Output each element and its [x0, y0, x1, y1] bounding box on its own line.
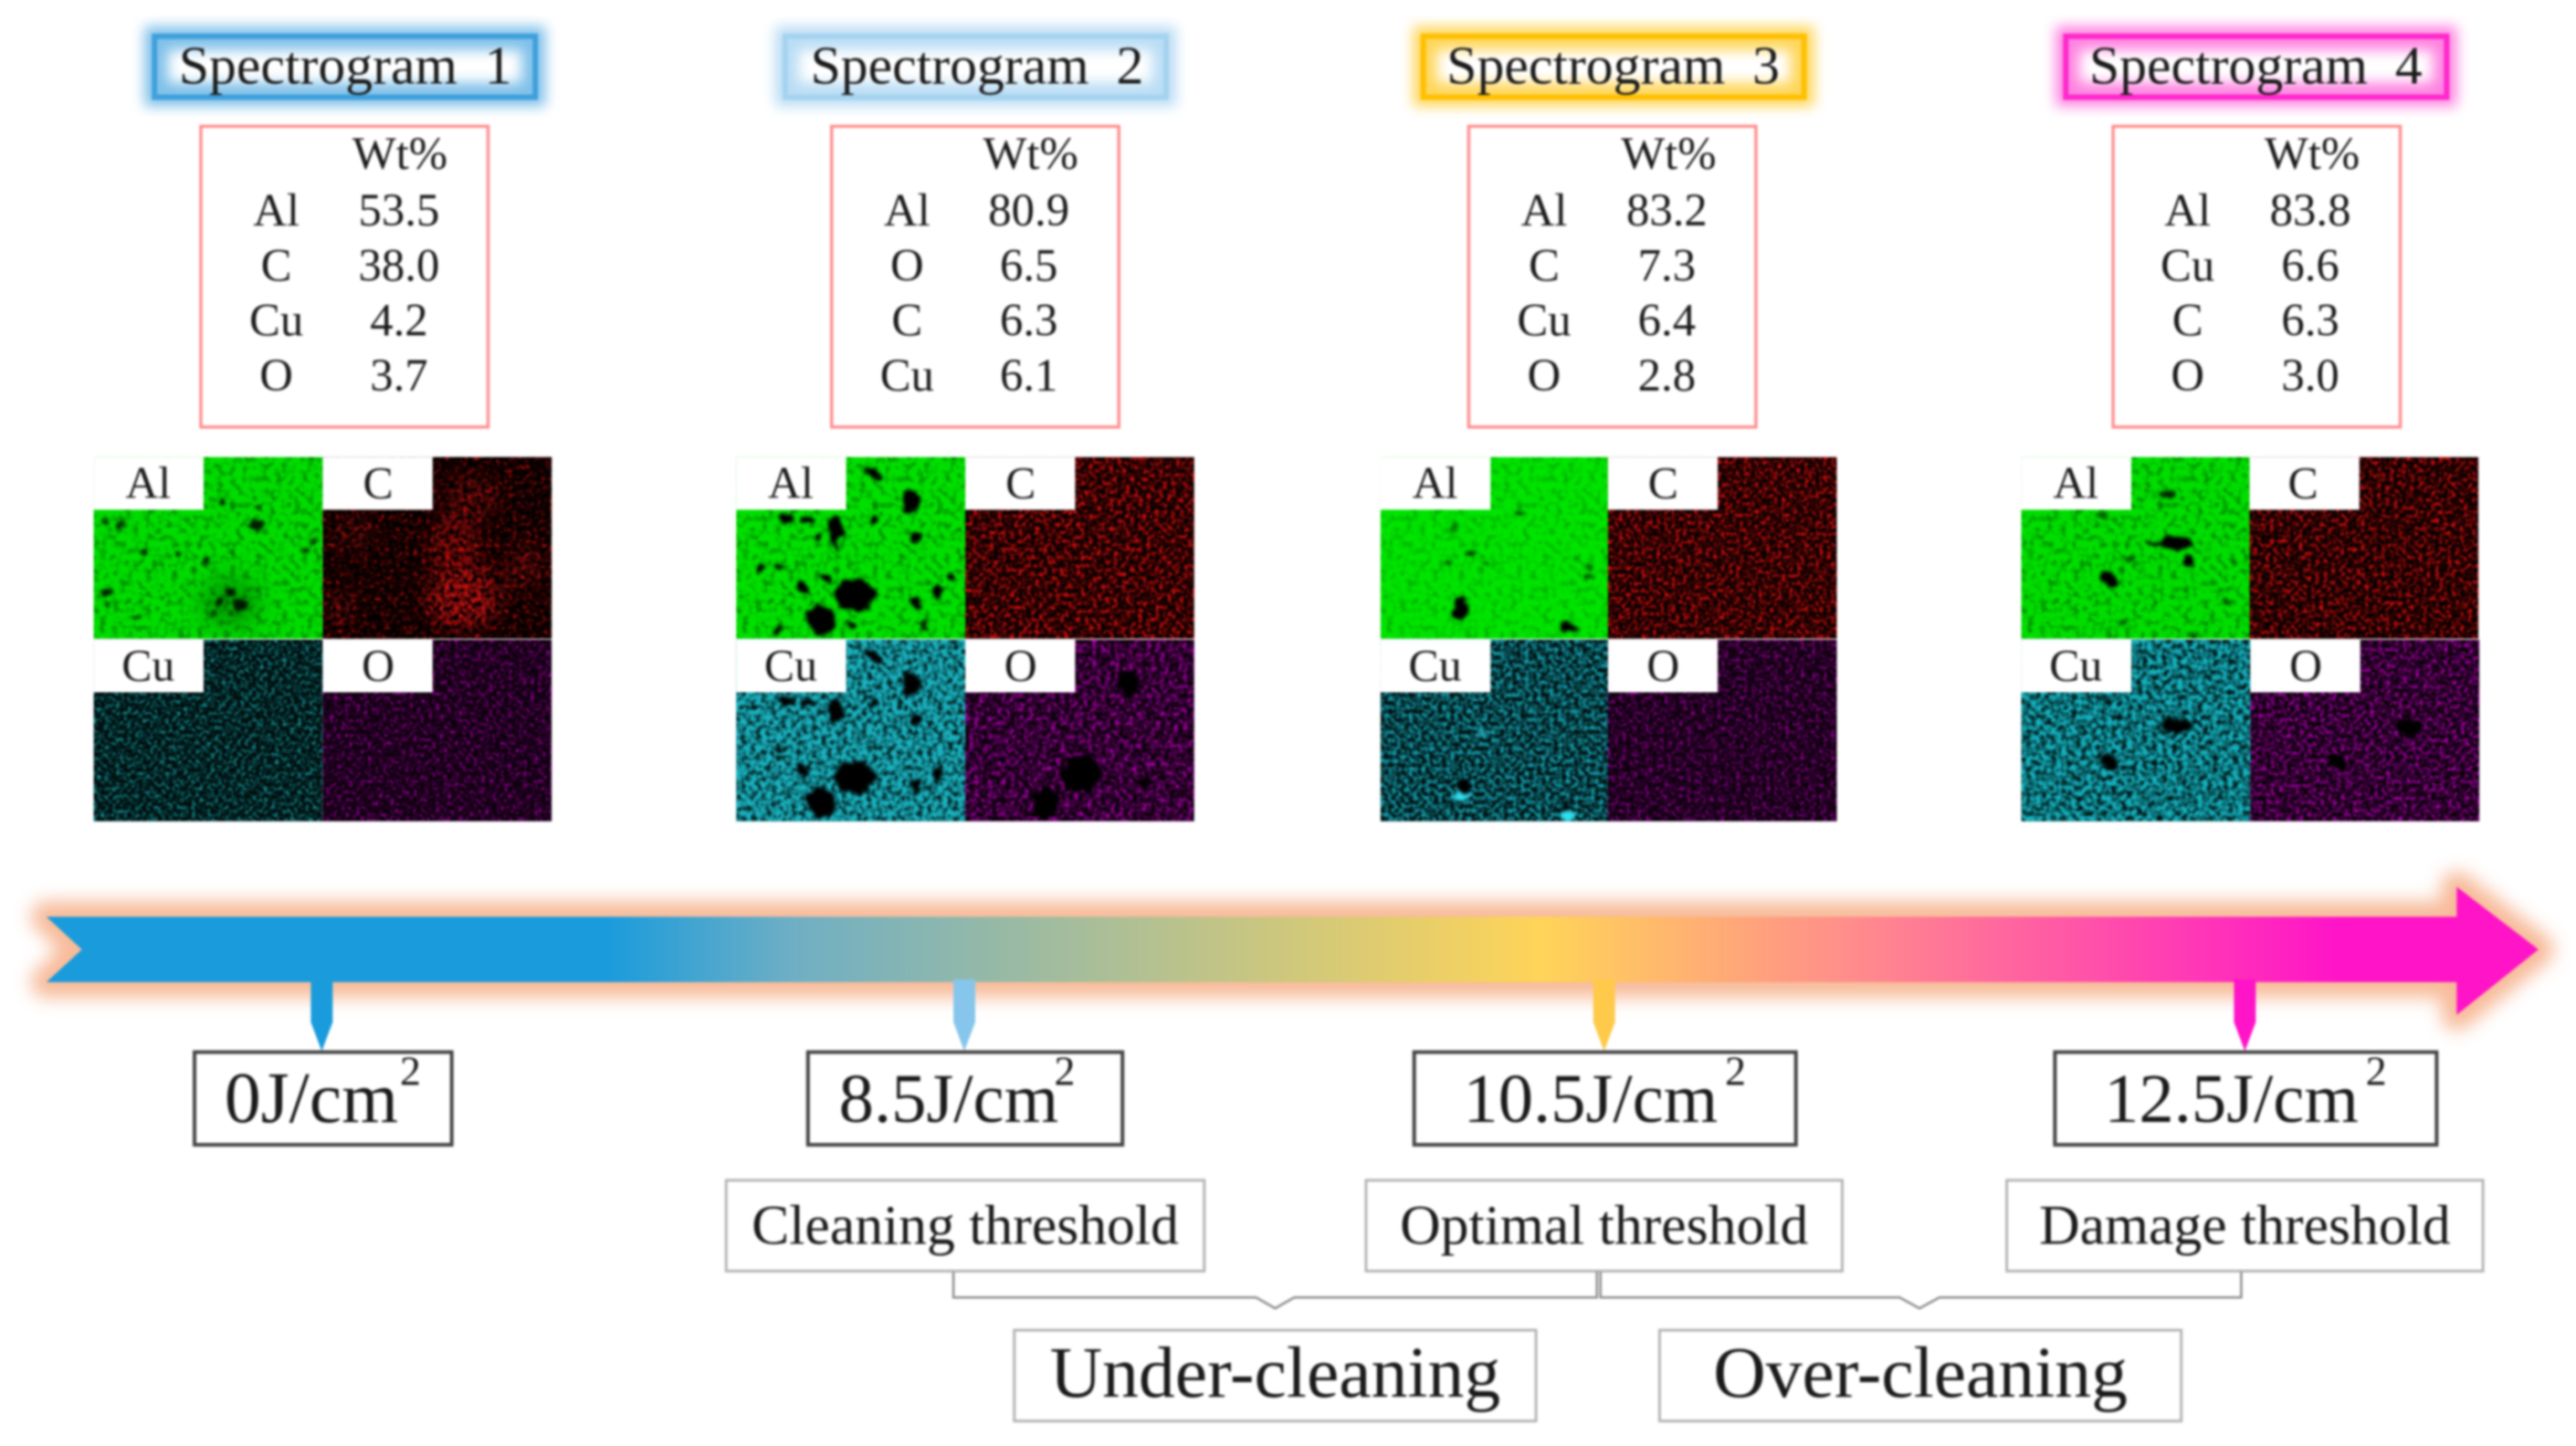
value box	[195, 1047, 452, 1145]
table: weight percent spectrogram 2: O	[890, 240, 924, 291]
bracket: under-cleaning range	[953, 1272, 1597, 1308]
map: Al	[1381, 457, 1610, 639]
map: Al: Al	[2053, 457, 2098, 508]
map: C: C	[1648, 457, 1678, 508]
table: weight percent spectrogram 4: Wt%	[2265, 128, 2360, 179]
table: weight percent spectrogram 1: O	[259, 350, 293, 401]
map: Cu: Cu	[764, 640, 817, 690]
map: O	[965, 640, 1194, 822]
table: weight percent spectrogram 4: C	[2172, 294, 2203, 345]
box: damage threshold	[2007, 1180, 2483, 1271]
box: damage threshold: Damage threshold	[2039, 1195, 2451, 1257]
map: C	[2249, 457, 2478, 639]
table: weight percent spectrogram 3: Cu	[1517, 294, 1572, 345]
map: O: O	[1004, 640, 1037, 690]
table: weight percent spectrogram 1: 53.5	[359, 184, 439, 236]
table: weight percent spectrogram 4: 83.8	[2270, 184, 2350, 236]
table: weight percent spectrogram 2: C	[891, 294, 922, 345]
table: weight percent spectrogram 2: Cu	[880, 350, 934, 401]
pin	[310, 972, 332, 1052]
table: weight percent spectrogram 4: 6.3	[2281, 294, 2339, 345]
map: O: O	[362, 640, 394, 690]
value box	[1414, 1047, 1796, 1145]
table: weight percent spectrogram 1: 4.2	[370, 294, 428, 345]
map: C: C	[2287, 457, 2318, 508]
value box: 10.5J/cm	[1463, 1060, 1718, 1137]
EDS element maps 4	[2022, 457, 2479, 822]
EDS element maps 1	[94, 457, 552, 822]
table: weight percent spectrogram 4: O	[2171, 350, 2204, 401]
table: weight percent spectrogram 4: Al	[2164, 184, 2211, 236]
marker: 10.5 J/cm2	[1414, 980, 1796, 1145]
table: weight percent spectrogram 1: Cu	[249, 294, 303, 345]
marker: 0 J/cm2	[195, 972, 452, 1145]
table: weight percent spectrogram 3	[1468, 126, 1756, 427]
table: weight percent spectrogram 2	[832, 126, 1119, 427]
map: Al	[2022, 457, 2250, 639]
panel: spectrogram 3	[1381, 36, 1837, 822]
box: under-cleaning: Under-cleaning	[1050, 1333, 1500, 1413]
value box	[808, 1047, 1122, 1145]
table: weight percent spectrogram 2: 6.1	[1000, 350, 1057, 401]
panel: spectrogram 1	[94, 36, 552, 822]
EDS element maps 3	[1381, 457, 1837, 822]
map: C	[965, 457, 1194, 639]
map: C	[1608, 457, 1837, 639]
value box: 2	[2366, 1047, 2387, 1094]
bracket: over-cleaning range	[1601, 1272, 2241, 1308]
map: C: C	[363, 457, 394, 508]
table: weight percent spectrogram 3: Al	[1521, 184, 1567, 236]
value box: 12.5J/cm	[2104, 1060, 2359, 1137]
table: weight percent spectrogram 3: 7.3	[1638, 240, 1696, 291]
pin	[953, 980, 975, 1052]
panel: spectrogram 4	[2022, 36, 2479, 822]
table: weight percent spectrogram 1: Al	[253, 184, 300, 236]
heading: Spectrogram 2: Spectrogram 2	[811, 36, 1143, 96]
map: O	[2250, 640, 2479, 822]
table: weight percent spectrogram 1	[201, 126, 488, 427]
table: weight percent spectrogram 3: 6.4	[1638, 294, 1696, 345]
value box: 8.5J/cm	[839, 1060, 1058, 1137]
map: O: O	[2289, 640, 2322, 690]
box: optimal threshold	[1366, 1180, 1842, 1271]
map: Cu	[736, 640, 965, 824]
map: Al: Al	[1413, 457, 1457, 508]
pin	[2234, 980, 2255, 1052]
map: O	[322, 640, 552, 822]
table: weight percent spectrogram 1: Wt%	[352, 128, 447, 179]
table: weight percent spectrogram 2: 6.3	[1000, 294, 1057, 345]
box: cleaning threshold: Cleaning threshold	[752, 1195, 1179, 1257]
map: Al	[94, 457, 322, 639]
EDS element maps 2	[736, 457, 1194, 824]
value box: 0J/cm	[225, 1058, 398, 1138]
box: optimal threshold: Optimal threshold	[1400, 1195, 1808, 1257]
map: Cu: Cu	[2049, 640, 2102, 690]
table: weight percent spectrogram 2: Wt%	[983, 128, 1078, 179]
box: over-cleaning: Over-cleaning	[1713, 1333, 2128, 1413]
table: weight percent spectrogram 3: Wt%	[1621, 128, 1717, 179]
value box: 2	[400, 1047, 421, 1094]
table: weight percent spectrogram 1: 3.7	[370, 350, 428, 401]
table: weight percent spectrogram 1: 38.0	[359, 240, 439, 291]
table: weight percent spectrogram 4	[2113, 126, 2401, 427]
table: weight percent spectrogram 4: 6.6	[2281, 240, 2339, 291]
map: O: O	[1646, 640, 1679, 690]
table: weight percent spectrogram 3: 2.8	[1638, 350, 1696, 401]
map: Al: Al	[768, 457, 814, 508]
heading: Spectrogram 4: Spectrogram 4	[2089, 36, 2423, 96]
heading: Spectrogram 3: Spectrogram 3	[1446, 36, 1780, 96]
arrow: energy density gradient	[47, 886, 2539, 1015]
value box: 2	[1725, 1047, 1746, 1094]
table: weight percent spectrogram 4: Cu	[2161, 240, 2214, 291]
map: C	[322, 457, 552, 639]
table: weight percent spectrogram 3: O	[1528, 350, 1561, 401]
map: Al	[736, 457, 965, 642]
table: weight percent spectrogram 3: C	[1529, 240, 1560, 291]
map: Al: Al	[125, 457, 171, 508]
map: Cu	[2022, 640, 2250, 822]
marker: 8.5 J/cm2	[808, 980, 1122, 1145]
value box: 2	[1055, 1047, 1075, 1094]
table: weight percent spectrogram 4: 3.0	[2281, 350, 2339, 401]
map: Cu: Cu	[1409, 640, 1462, 690]
map: Cu	[1381, 640, 1610, 822]
map: C: C	[1005, 457, 1036, 508]
table: weight percent spectrogram 3: 83.2	[1626, 184, 1708, 236]
table: weight percent spectrogram 2: 80.9	[988, 184, 1069, 236]
table: weight percent spectrogram 2: Al	[884, 184, 931, 236]
panel: spectrogram 2	[736, 36, 1194, 824]
map: Cu	[94, 640, 322, 822]
value box	[2055, 1047, 2436, 1145]
box: cleaning threshold	[726, 1180, 1204, 1271]
map: Cu: Cu	[121, 640, 174, 690]
table: weight percent spectrogram 1: C	[261, 240, 292, 291]
heading: Spectrogram 1: Spectrogram 1	[179, 36, 512, 96]
pin	[1593, 980, 1615, 1052]
map: O	[1608, 640, 1837, 822]
table: weight percent spectrogram 2: 6.5	[1000, 240, 1057, 291]
marker: 12.5 J/cm2	[2055, 980, 2436, 1145]
